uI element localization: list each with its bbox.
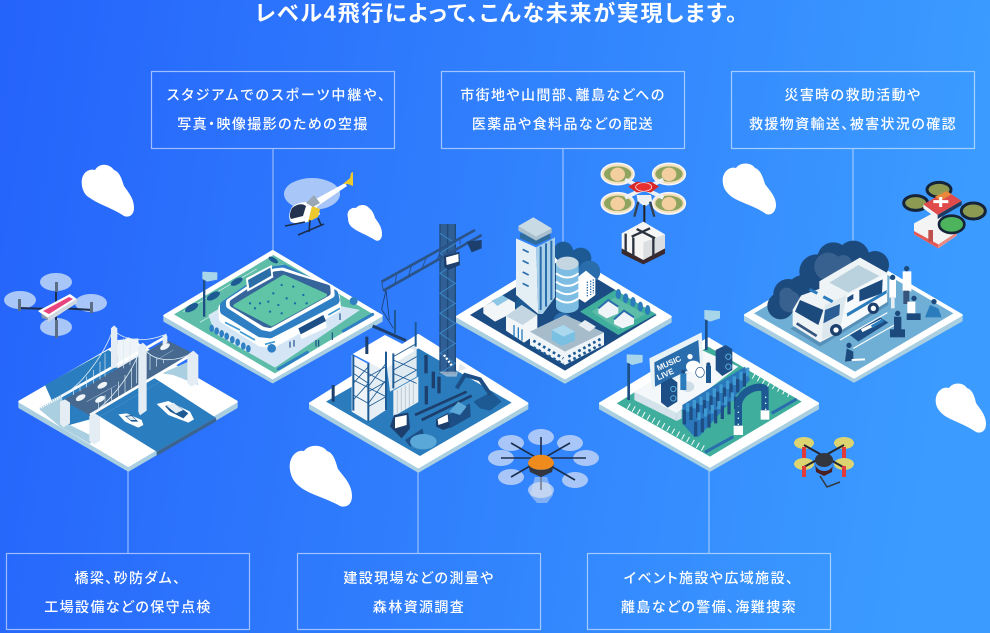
helicopter	[284, 172, 353, 235]
people	[290, 313, 340, 348]
suspension cables	[63, 328, 194, 414]
drone: dark quadcopter	[794, 437, 854, 487]
low block	[483, 296, 515, 322]
pitch	[235, 276, 325, 325]
platform: stadium	[164, 251, 382, 382]
stretcher	[840, 313, 897, 348]
title: レベル4飛行によって、こんな未来が実現します。	[255, 1, 737, 26]
workers	[332, 337, 441, 404]
bulldozer	[390, 413, 437, 449]
drone: pink quadcopter	[4, 273, 107, 338]
caption: disaster: 救援物資輸送、被害状況の確認	[749, 116, 957, 132]
stand band	[225, 270, 335, 333]
cloud 3	[290, 446, 352, 507]
tall block	[578, 271, 595, 303]
screen	[649, 332, 703, 390]
beams	[415, 392, 472, 420]
platform: construction	[310, 224, 527, 472]
caption: inspection: 橋梁、砂防ダム、	[74, 570, 182, 586]
trees	[209, 297, 358, 353]
park trees	[616, 289, 650, 315]
platform: event	[600, 310, 818, 471]
flag	[203, 278, 205, 317]
medics	[845, 266, 942, 362]
beam	[373, 326, 406, 341]
caption: inspection	[6, 554, 250, 630]
scaffold faces	[352, 355, 368, 422]
corrugated wall	[393, 377, 418, 417]
caption: delivery: 市街地や山間部、離島などへの	[460, 87, 666, 103]
trees behind	[516, 242, 600, 331]
water	[100, 382, 216, 452]
top case	[923, 191, 962, 215]
tower crane	[382, 224, 482, 377]
road markings	[87, 350, 173, 402]
caption: delivery	[442, 72, 684, 148]
caption: survey: 森林資源調査	[373, 599, 465, 615]
van shadow	[790, 293, 888, 347]
platform: city	[457, 217, 671, 383]
towers	[60, 325, 198, 444]
caption: stadium	[152, 72, 394, 148]
players	[249, 284, 308, 314]
stage	[634, 350, 738, 413]
stairs	[38, 396, 62, 408]
cars	[75, 342, 171, 404]
parking lines	[183, 269, 272, 322]
caption: stadium: スタジアムでのスポーツ中継や、	[167, 87, 387, 103]
van body	[793, 258, 887, 342]
excavator	[457, 375, 502, 411]
seating	[233, 274, 328, 325]
gate	[298, 316, 327, 339]
white rim	[230, 272, 331, 328]
dump truck	[436, 402, 471, 430]
caption: stadium: 写真・映像撮影のための空撮	[177, 116, 369, 132]
crowd	[682, 367, 750, 437]
stadium blue windows	[225, 308, 340, 344]
lower case	[914, 212, 957, 248]
scoreboard	[246, 265, 273, 292]
caption: disaster	[732, 72, 974, 148]
green rotor	[939, 216, 964, 233]
tower	[516, 238, 538, 314]
body	[628, 182, 659, 192]
caption: security	[588, 554, 830, 630]
parking strips	[278, 314, 373, 369]
stadium outer wall	[223, 270, 336, 343]
flags	[705, 318, 708, 350]
mid block	[506, 305, 537, 343]
houses	[598, 300, 634, 328]
road	[63, 340, 192, 417]
cloud 4	[723, 164, 776, 215]
connector lines	[128, 149, 853, 553]
cloud 1	[82, 165, 134, 217]
cloud 5	[936, 384, 986, 433]
small ship	[118, 413, 143, 428]
platform: event: LIVE	[655, 366, 676, 382]
scaffold frame	[353, 310, 417, 422]
rotors	[904, 182, 985, 219]
large ship	[157, 401, 194, 423]
blue strips	[705, 399, 797, 452]
cloud 2	[348, 205, 382, 241]
drum kit and band	[680, 354, 711, 392]
platform: ambulance	[745, 241, 962, 382]
cargo box	[622, 222, 665, 262]
speakers	[661, 378, 677, 408]
caption: survey	[298, 554, 540, 630]
scaffold roof	[353, 335, 415, 370]
bushes	[767, 241, 889, 319]
drone: orange octocopter	[488, 429, 599, 503]
arms	[625, 180, 663, 198]
arch	[734, 387, 769, 435]
wide building	[530, 315, 604, 365]
drone: medical	[904, 182, 985, 248]
caption: survey: 建設現場などの測量や	[343, 570, 495, 586]
platform: event: MUSIC	[655, 354, 683, 373]
caption: inspection: 工場設備などの保守点検	[44, 599, 212, 615]
platform: bridge	[19, 325, 237, 471]
cylinder	[556, 263, 579, 307]
caption: delivery: 医薬品や食料品などの配送	[472, 116, 654, 132]
rotors	[601, 163, 685, 214]
caption: security: 離島などの警備、海難捜索	[621, 599, 797, 615]
caption: disaster: 災害時の救助活動や	[784, 87, 922, 103]
cars in lot	[184, 255, 279, 314]
fences	[628, 406, 703, 448]
caption: security: イベント施設や広域施設、	[624, 570, 794, 586]
drone: red delivery	[601, 163, 685, 264]
